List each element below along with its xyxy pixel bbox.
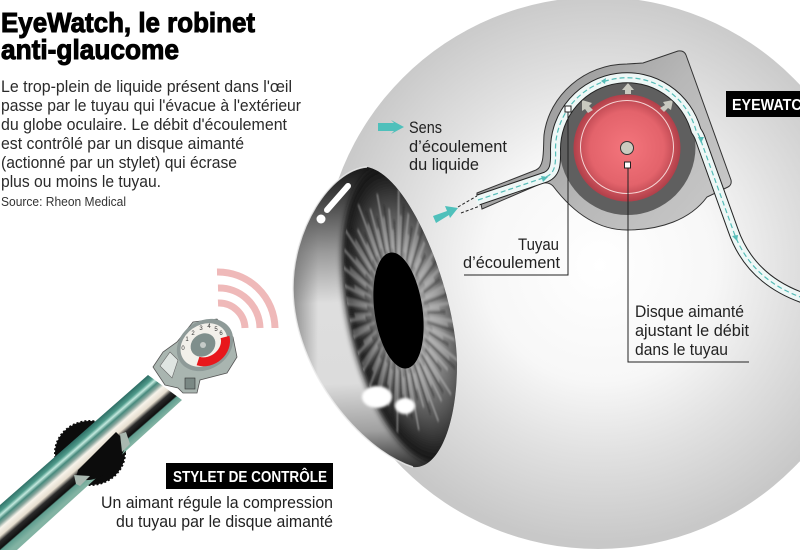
legend: flow direction bbox=[378, 119, 507, 174]
legend label: du liquide bbox=[409, 156, 479, 174]
intro text block: plus ou moins le tuyau. bbox=[1, 173, 161, 191]
label: stylet de controle bbox=[166, 463, 333, 489]
lens rim bbox=[293, 167, 413, 467]
pupil bbox=[367, 249, 430, 372]
drainage tube bbox=[458, 78, 800, 299]
dial bbox=[167, 308, 243, 382]
control stylus bbox=[0, 308, 243, 550]
stylus caption: Un aimant régule la compression bbox=[101, 494, 333, 512]
dark ring bbox=[560, 79, 696, 215]
dial numbers: 4 bbox=[207, 324, 211, 330]
cornea lens bbox=[293, 167, 457, 467]
eye globe background bbox=[322, 0, 800, 549]
callout: disque: ajustant le débit bbox=[635, 322, 749, 340]
dial numbers bbox=[181, 324, 223, 352]
eye illustration bbox=[292, 166, 458, 468]
dial numbers: 3 bbox=[199, 326, 203, 332]
flow markers on tube bbox=[541, 78, 738, 241]
label: eyewatch bbox=[726, 91, 800, 117]
callout: disque bbox=[624, 162, 749, 362]
head body bbox=[153, 319, 237, 393]
wheel clips bbox=[74, 432, 130, 486]
intro text block bbox=[1, 78, 301, 191]
callout: disque: dans le tuyau bbox=[635, 341, 728, 359]
callout: tuyau bbox=[463, 106, 571, 275]
intro text block: (actionné par un stylet) qui écrase bbox=[1, 154, 237, 172]
legend label: d’écoulement bbox=[409, 138, 507, 156]
device housing bbox=[477, 51, 731, 230]
stylus caption bbox=[101, 494, 333, 531]
source: Source: Rheon Medical bbox=[1, 195, 126, 209]
legend label: Sens bbox=[409, 119, 442, 137]
title: EyeWatch, le robinet bbox=[1, 7, 255, 38]
legend label bbox=[409, 119, 507, 174]
wheel overlap bbox=[76, 432, 124, 480]
title bbox=[1, 7, 255, 65]
label: stylet de controle: STYLET DE CONTRÔLE bbox=[173, 467, 327, 486]
dial numbers: 0 bbox=[181, 346, 185, 352]
shaft bbox=[0, 375, 182, 550]
intro text block: du globe oculaire. Le débit d'écoulement bbox=[1, 116, 287, 134]
dial numbers: 1 bbox=[185, 337, 189, 343]
iris bbox=[338, 168, 458, 464]
magnetic disc bbox=[574, 94, 680, 202]
callout: tuyau: d’écoulement bbox=[463, 254, 560, 272]
intro text block: passe par le tuyau qui l'évacue à l'extérieur bbox=[1, 97, 301, 115]
signal waves bbox=[217, 272, 275, 328]
eyewatch device diagram bbox=[458, 51, 800, 299]
flow arrow into tube bbox=[433, 206, 458, 223]
dial numbers: 2 bbox=[191, 331, 195, 337]
dial numbers: 6 bbox=[219, 331, 223, 337]
callout: tuyau: Tuyau bbox=[518, 236, 559, 254]
dial centre bbox=[186, 329, 220, 361]
title: anti-glaucome bbox=[1, 34, 179, 65]
eye highlights bbox=[316, 186, 415, 414]
stylus head bbox=[153, 308, 243, 393]
dial numbers: 5 bbox=[214, 327, 218, 333]
knurled wheel bbox=[55, 421, 125, 485]
cornea edge shading bbox=[293, 236, 316, 370]
pressure arrows bbox=[582, 83, 673, 113]
stylus caption: du tuyau par le disque aimanté bbox=[116, 513, 333, 531]
dial red sector bbox=[198, 337, 226, 362]
intro text block: Le trop-plein de liquide présent dans l'œil bbox=[1, 78, 292, 96]
callout: disque: Disque aimanté bbox=[635, 303, 744, 321]
intro text block: est contrôlé par un disque aimanté bbox=[1, 135, 244, 153]
teal arrow bbox=[378, 120, 404, 134]
